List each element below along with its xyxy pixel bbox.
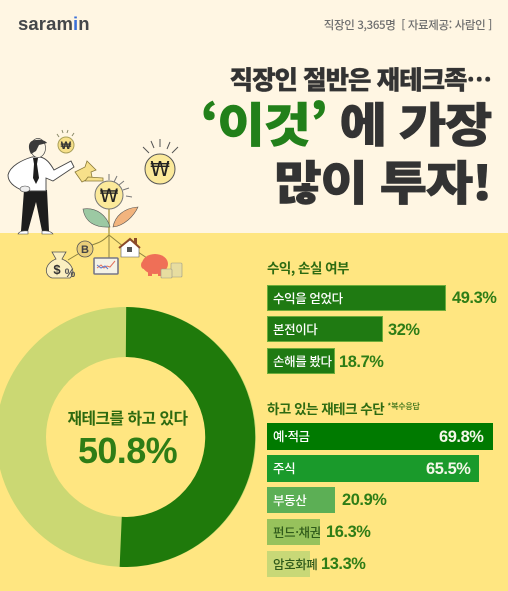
- donut ring: 50.8% share: [121, 332, 230, 542]
- icon: watering can: [75, 161, 103, 182]
- logo: saramin: saramin: [18, 13, 90, 34]
- bar: crypto: 암호화폐: [273, 554, 317, 573]
- bar: stocks: [267, 455, 479, 482]
- bar: funds and bonds: 펀드·채권: [273, 522, 321, 541]
- icon: money bag: %: [65, 266, 76, 280]
- donut ring: remaining share: [21, 332, 231, 542]
- illustration: man watering money plant: [8, 130, 182, 280]
- icon: plant with coin and leaves: ₩: [100, 185, 119, 207]
- value: 18.7%: 18.7%: [339, 353, 383, 371]
- icon: man: [8, 138, 74, 234]
- title: [201, 60, 492, 214]
- bar: broke even: [267, 316, 383, 342]
- donut label text: 재테크를 하고 있다: [67, 406, 188, 429]
- bar: lost: [267, 348, 335, 374]
- heading: investment methods: 하고 있는 재테크 수단 *복수응답: [267, 398, 420, 418]
- heading: profit or loss: 수익, 손실 여부: [267, 257, 349, 277]
- icon: bitcoin coin: B: [81, 244, 89, 256]
- bar: gained: [267, 285, 446, 311]
- icon: piggy bank and coins: [141, 254, 182, 278]
- value: 13.3%: 13.3%: [321, 555, 365, 573]
- bar: funds and bonds: [267, 519, 320, 545]
- title line 1: 직장인 절반은 재테크족…: [230, 60, 491, 97]
- icon: house: [119, 238, 140, 257]
- icon: stock chart: [94, 258, 118, 274]
- icon: large won coin: ₩: [150, 157, 170, 181]
- title line 2: ‘이것’ 에 가장: [201, 87, 491, 156]
- icon: money bag: $: [53, 262, 61, 277]
- value: 69.8%: 69.8%: [439, 428, 483, 446]
- panel: profit or loss bars: [267, 285, 496, 374]
- bar: real estate: 부동산: [273, 490, 306, 509]
- icon: small won coin: ₩: [61, 140, 72, 152]
- value: 65.5%: 65.5%: [426, 460, 470, 478]
- bar: broke even: 본전이다: [273, 319, 317, 338]
- icon: small won coin: [57, 130, 74, 153]
- bar: savings: [267, 423, 493, 450]
- donut center label: [67, 406, 188, 471]
- lower yellow background: [0, 233, 508, 591]
- bar: real estate: [267, 487, 335, 513]
- donut chart: [0, 307, 256, 567]
- icon: money bag: [46, 252, 76, 280]
- value: 49.3%: 49.3%: [452, 289, 496, 307]
- value: 32%: 32%: [388, 321, 420, 339]
- bar: lost: 손해를 봤다: [273, 351, 332, 370]
- source note: 직장인 3,365명 [ 자료제공: 사람인 ]: [324, 17, 492, 33]
- title line 3: 많이 투자!: [274, 145, 491, 214]
- icon: large won coin: [143, 139, 178, 184]
- icon: bitcoin coin: [77, 241, 93, 257]
- bar: savings: 예·적금: [273, 426, 310, 445]
- bar: stocks: 주식: [273, 458, 295, 477]
- icon: plant with coin and leaves: [68, 174, 150, 260]
- donut value: 50.8%: [78, 430, 177, 471]
- value: 16.3%: 16.3%: [326, 523, 370, 541]
- bar: gained: 수익을 얻었다: [273, 288, 343, 307]
- bar: crypto: [267, 551, 310, 577]
- panel: investment method bars: [267, 423, 493, 577]
- value: 20.9%: 20.9%: [342, 491, 386, 509]
